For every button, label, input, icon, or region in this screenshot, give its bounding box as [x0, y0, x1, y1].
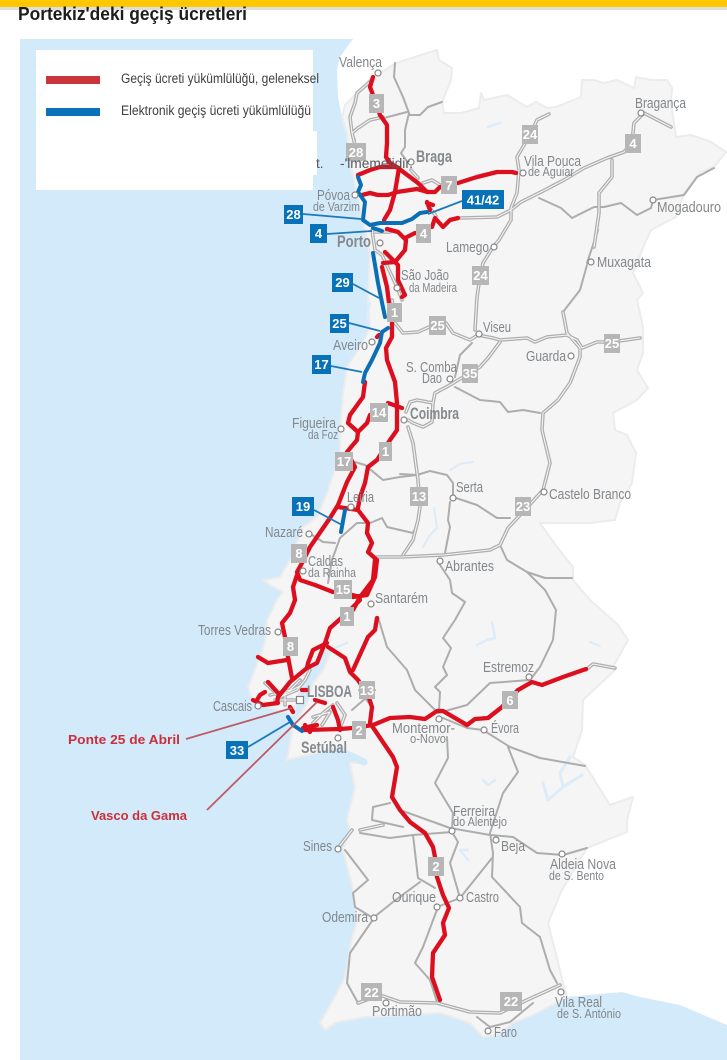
grey route number badges: 24 — [523, 127, 538, 142]
city labels: S. Comba — [406, 359, 457, 376]
city labels: São João — [401, 267, 449, 284]
grey route number badges: 35 — [463, 366, 477, 381]
grey route number badges: 14 — [372, 405, 387, 420]
grey route number badges — [283, 94, 641, 1011]
city labels: Bragança — [635, 95, 687, 112]
text fragments partly hidden by legend: t. — [316, 156, 324, 171]
city labels: da Foz — [308, 427, 338, 442]
callout: Vasco da Gama: Vasco da Gama — [91, 808, 188, 823]
blue electronic toll roads — [288, 177, 427, 731]
city labels: de S. Bento — [549, 868, 604, 883]
city labels: LISBOA — [307, 683, 352, 701]
legend swatch: electronic toll — [46, 108, 100, 116]
leader lines: electronic toll sections — [248, 201, 462, 747]
grey route number badges: 22 — [364, 985, 379, 1000]
grey route number badges: 15 — [336, 582, 350, 597]
city labels: Odemira — [322, 909, 369, 926]
road network: motorways, outer casing — [265, 80, 671, 1013]
grey route number badges: 8 — [295, 546, 303, 561]
city labels: Aveiro — [333, 337, 368, 354]
city labels: Abrantes — [445, 558, 494, 575]
blue route number badges — [226, 190, 504, 759]
grey route number badges: 1 — [343, 609, 351, 624]
city labels: Nazaré — [265, 524, 303, 541]
city labels: Caldas — [308, 553, 343, 570]
legend text: electronic toll: Elektronik geçiş ücreti yükümlülüğü — [121, 103, 311, 118]
grey route number badges: 2 — [432, 859, 440, 874]
grey route number badges: 1 — [391, 305, 398, 320]
callout: Ponte 25 de Abril: Ponte 25 de Abril — [68, 732, 180, 747]
city labels: Ourique — [392, 889, 436, 906]
legend — [36, 50, 319, 190]
city labels — [198, 54, 721, 1041]
city labels: da Madeira — [409, 280, 458, 295]
grey route number badges: 17 — [337, 454, 351, 469]
leader lines: bridges — [186, 702, 317, 810]
city labels: Vila Pouca — [524, 153, 582, 170]
city labels: da Rainha — [308, 565, 357, 580]
city labels: Braga — [416, 148, 453, 166]
blue route number badges: 28 — [286, 207, 301, 222]
city labels: Beja — [501, 838, 526, 855]
grey route number badges: 25 — [430, 318, 445, 333]
city labels: de S. António — [557, 1006, 621, 1021]
grey route number badges: 25 — [605, 336, 619, 351]
city labels: Estremoz — [483, 659, 534, 676]
city labels: Valença — [339, 54, 383, 71]
road network: motorways, inner line — [265, 80, 671, 1013]
grey route number badges: 24 — [473, 268, 488, 283]
grey route number badges: 13 — [360, 683, 374, 698]
title: Portekiz'deki geçiş ücretleri — [18, 4, 247, 24]
city labels: de Aguiar — [528, 164, 575, 179]
grey route number badges: 3 — [373, 96, 380, 111]
city labels: Portimão — [372, 1003, 422, 1020]
top bar — [0, 0, 727, 10]
blue route number badges: 25 — [332, 316, 347, 331]
city labels: Cascais — [213, 698, 252, 715]
water bodies — [320, 123, 600, 860]
city labels: Viseu — [483, 319, 511, 336]
city labels: Sines — [303, 838, 332, 855]
city labels: Ferreira — [453, 803, 496, 820]
grey route number badges: 4 — [420, 226, 428, 241]
blue route number badges: 17 — [314, 357, 329, 372]
city labels: Lamego — [446, 239, 489, 256]
city labels: Évora — [491, 720, 519, 737]
grey route number badges: 4 — [629, 136, 637, 151]
blue route number badges: 29 — [335, 275, 350, 290]
grey route number badges: 2 — [355, 723, 363, 738]
city labels: Porto — [337, 233, 371, 251]
grey route number badges: 8 — [287, 639, 294, 654]
city labels: Leiria — [347, 489, 374, 506]
grey route number badges: 6 — [506, 693, 514, 708]
grey route number badges: 28 — [349, 145, 363, 160]
city labels: do Alentejo — [453, 814, 507, 829]
grey route number badges: 7 — [445, 178, 453, 193]
grey route number badges: 1 — [382, 444, 389, 459]
city labels: Castro — [466, 889, 499, 906]
legend swatch: traditional toll — [46, 76, 100, 84]
road network: national roads — [309, 63, 714, 1027]
red toll roads — [253, 77, 586, 1000]
city labels: Dao — [422, 370, 442, 387]
legend text: traditional toll: Geçiş ücreti yükümlülüğü, geleneksel — [121, 71, 319, 86]
grey route number badges: 13 — [412, 489, 426, 504]
city labels: Setúbal — [301, 739, 347, 757]
city labels: Montemor- — [392, 720, 455, 737]
blue route number badges: 19 — [296, 499, 310, 514]
blue route number badges: 33 — [230, 743, 244, 758]
city labels: Castelo Branco — [549, 486, 631, 503]
city labels: de Varzim — [313, 199, 360, 214]
city labels: Santarém — [375, 590, 428, 607]
grey route number badges: 22 — [504, 994, 518, 1009]
city labels: Coimbra — [410, 405, 460, 423]
city labels: Póvoa — [317, 187, 350, 204]
city labels: Aldeia Nova — [550, 856, 617, 873]
city labels: Serta — [456, 479, 483, 496]
grey route number badges: 23 — [516, 499, 530, 514]
city labels: Torres Vedras — [198, 622, 271, 639]
city labels: Guarda — [526, 348, 567, 365]
text fragments partly hidden by legend: -'lmemelidir. — [340, 156, 413, 171]
land: Portugal — [248, 50, 726, 1037]
city labels: Figueira — [292, 415, 337, 432]
blue route number badges: 41/42 — [467, 192, 499, 208]
city labels: Muxagata — [597, 254, 652, 271]
city markers — [255, 70, 656, 1034]
blue route number badges: 4 — [315, 226, 323, 241]
city labels: Vila Real — [555, 994, 602, 1011]
city labels: o-Novo — [410, 731, 446, 746]
city labels: Faro — [494, 1024, 517, 1041]
